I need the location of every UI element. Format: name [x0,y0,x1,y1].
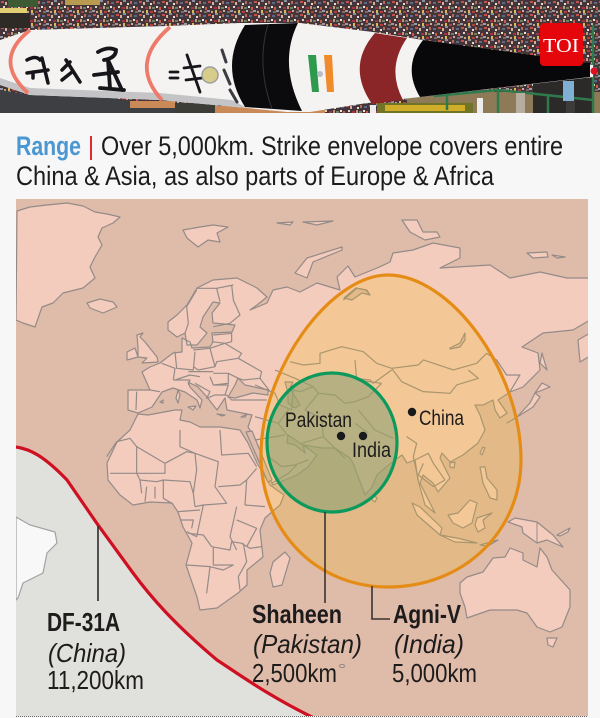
launcher [0,90,175,113]
heading text line 2: China & Asia, as also parts of Europe & Africa [16,161,495,191]
South America [16,517,57,600]
country borders [107,285,537,593]
marker: China [408,407,464,430]
Gulf of Ob [344,288,370,300]
label: Shaheen: Shaheen [252,599,342,629]
label: Shaheen: (Pakistan) [253,629,362,659]
Taiwan [480,447,485,455]
label: DF-31A: (China) [48,638,126,668]
land masses [16,203,590,668]
Svalbard [183,225,228,247]
label: Agni-V: Agni-V [393,599,462,629]
marker: Pakistan [285,409,352,440]
leader line: Shaheen [324,512,326,603]
DF-31A range curve [16,447,318,718]
Sumatra [412,503,442,535]
salmon stripes [10,27,170,100]
Madagascar [270,552,290,587]
label: Shaheen: 2,500km [252,658,337,688]
Agni-V range envelope [261,275,521,587]
marker: India: India [352,439,391,462]
label: Agni-V [392,599,477,688]
Russia, Mongolia and China borders [290,288,520,393]
Arctic islands [277,220,565,258]
inland seas [228,288,465,482]
label: DF-31A [47,607,144,695]
Persian Gulf [287,435,305,453]
Shaheen range circle [267,373,397,512]
Hainan [450,462,455,468]
DF-31A out-of-range area [16,447,318,718]
Lake Baikal [450,333,465,349]
missile shading [0,78,247,108]
Caspian Sea [285,382,300,408]
flag markings [308,55,334,92]
Tasmania [547,638,557,647]
Ireland [127,348,138,360]
Africa [107,410,284,610]
Kerguelen islet [340,664,344,668]
Timor [480,540,498,546]
missile markings [27,48,237,102]
heading divider [90,136,92,160]
red tip [590,68,598,74]
Southeast Asia borders [407,437,445,487]
Sri Lanka [372,495,377,502]
TOI logo [540,23,583,66]
Black Sea [228,378,268,398]
label: Shaheen [252,599,362,688]
leader line: DF-31A [97,526,99,601]
Novaya Zemlya [295,247,342,278]
Sulawesi [475,513,492,532]
Red Sea [246,431,272,482]
label: DF-31A: 11,200km [47,665,144,695]
label: DF-31A: DF-31A [47,607,120,637]
marker: India [352,432,391,462]
label: Agni-V: (India) [394,629,464,659]
panel: world map [16,199,590,718]
Kamchatka [578,333,590,362]
Borneo [448,500,477,528]
missile body [0,23,593,112]
Europe borders [136,333,269,410]
South Asia and Middle East borders [255,360,393,483]
maroon band [360,33,407,104]
Greenland [16,203,120,327]
label: Agni-V: 5,000km [392,658,477,688]
Mediterranean islands [160,390,247,417]
New Guinea [508,518,570,547]
Eurasia [128,243,590,513]
heading [16,131,563,191]
marker: China: China [419,407,464,430]
Africa borders [107,430,265,593]
leader line: Agni-V [372,586,390,619]
heading label: Range: Range [16,131,81,161]
Philippines [480,467,497,500]
Australia [460,548,570,632]
black band [232,23,302,111]
photo: Agni-V missile on parade [0,0,600,113]
New Guinea border [536,522,538,543]
TOI logo: TOI [543,35,579,57]
black nose [412,40,590,97]
Scandinavia borders [185,285,240,333]
UK [137,333,158,363]
Japan [507,353,550,423]
Java [440,535,477,543]
marker: Pakistan: Pakistan [285,409,352,432]
emblem [202,67,218,83]
Iceland [87,299,117,313]
